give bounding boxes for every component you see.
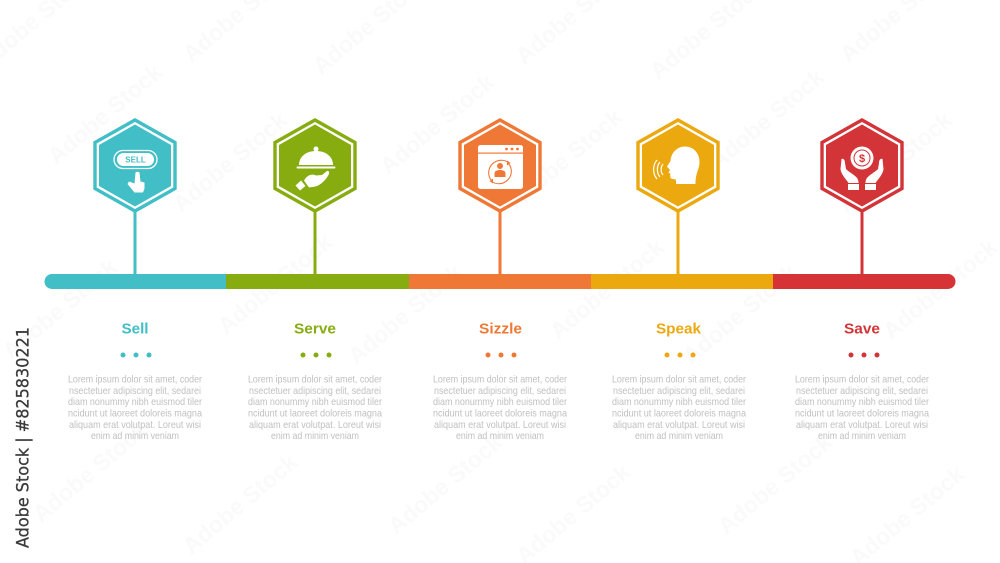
text block: Sell: enim ad minim veniam xyxy=(91,430,179,442)
watermark pattern: Adobe Stock xyxy=(213,229,337,339)
text block: Speak: ncidunt ut laoreet doloreis magna xyxy=(612,408,746,420)
watermark pattern: Adobe Stock xyxy=(705,64,829,174)
text block: Save: diam nonummy nibh euismod tiler xyxy=(795,396,929,408)
watermark pattern: Adobe Stock xyxy=(383,429,507,539)
watermark pattern: Adobe Stock xyxy=(678,259,802,369)
text block: Serve: ncidunt ut laoreet doloreis magna xyxy=(248,408,382,420)
watermark pattern: Adobe Stock xyxy=(833,107,957,217)
title: Sizzle: Sizzle xyxy=(479,322,522,338)
watermark pattern: Adobe Stock xyxy=(343,259,467,369)
watermark pattern: Adobe Stock xyxy=(713,429,837,539)
text block: Sell: Lorem ipsum dolor sit amet, coder xyxy=(68,374,202,386)
hexagon marker: Save xyxy=(822,120,902,276)
watermark pattern: Adobe Stock xyxy=(28,417,152,527)
dots: Sell xyxy=(120,352,152,358)
panel: Sizzle xyxy=(433,120,567,442)
title: Save: Save xyxy=(844,322,880,338)
icon: cloche on serving hand xyxy=(296,146,336,190)
panel: Save xyxy=(795,120,929,442)
text block: Serve: diam nonummy nibh euismod tiler xyxy=(248,396,382,408)
panel: Serve xyxy=(248,120,382,442)
text block: Serve: nsectetuer adipiscing elit, sedarei xyxy=(249,385,381,397)
text block: Sell: nsectetuer adipiscing elit, sedarei xyxy=(69,385,201,397)
watermark pattern: Adobe Stock xyxy=(375,69,499,179)
watermark pattern: Adobe Stock xyxy=(43,59,167,169)
hexagon marker: Speak xyxy=(638,120,718,276)
text block: Speak: aliquam erat volutpat. Loreut wisi xyxy=(613,419,745,431)
watermark pattern: Adobe Stock xyxy=(545,234,669,344)
text block: Speak xyxy=(612,374,746,442)
text block: Save: Lorem ipsum dolor sit amet, coder xyxy=(795,374,929,386)
icon: hands holding coin xyxy=(840,146,884,190)
watermark pattern: Adobe Stock xyxy=(178,449,302,559)
icon: sell button and pointing hand: SELL xyxy=(125,156,146,165)
panel: Speak xyxy=(612,120,746,442)
stock credit: Adobe Stock | #825830221 xyxy=(14,327,34,548)
text block: Save: enim ad minim veniam xyxy=(818,430,906,442)
text block: Sizzle: diam nonummy nibh euismod tiler xyxy=(433,396,567,408)
text block: Sizzle: enim ad minim veniam xyxy=(456,430,544,442)
text block: Sell: diam nonummy nibh euismod tiler xyxy=(68,396,202,408)
dots: Speak xyxy=(664,352,696,358)
icon: browser window with user cycle xyxy=(478,145,523,189)
text block: Save: ncidunt ut laoreet doloreis magna xyxy=(795,408,929,420)
hexagon marker: Serve xyxy=(275,120,355,276)
text block: Sell: aliquam erat volutpat. Loreut wisi xyxy=(69,419,201,431)
watermark pattern: Adobe Stock xyxy=(168,107,292,217)
text block: Sizzle: Lorem ipsum dolor sit amet, coder xyxy=(433,374,567,386)
dots: Save xyxy=(848,352,880,358)
text block: Serve xyxy=(248,374,382,442)
text block: Sizzle: ncidunt ut laoreet doloreis magna xyxy=(433,408,567,420)
watermark pattern: Adobe Stock xyxy=(878,234,1000,344)
text block: Sizzle: aliquam erat volutpat. Loreut wisi xyxy=(434,419,566,431)
text block: Save: aliquam erat volutpat. Loreut wisi xyxy=(796,419,928,431)
text block: Sell: ncidunt ut laoreet doloreis magna xyxy=(68,408,202,420)
dots: Sizzle xyxy=(486,352,516,358)
title: Speak: Speak xyxy=(656,322,702,338)
text block: Serve: enim ad minim veniam xyxy=(271,430,359,442)
text block: Speak: enim ad minim veniam xyxy=(635,430,723,442)
icon: hands holding coin: $ xyxy=(859,153,865,165)
text block: Sell xyxy=(68,374,202,442)
icon: sell button and pointing hand xyxy=(114,150,157,192)
text block: Speak: nsectetuer adipiscing elit, sedarei xyxy=(613,385,745,397)
title: Sell: Sell xyxy=(122,322,148,338)
watermark pattern: Adobe Stock xyxy=(0,254,122,364)
text block: Sizzle: nsectetuer adipiscing elit, sedarei xyxy=(434,385,566,397)
text block: Serve: aliquam erat volutpat. Loreut wisi xyxy=(249,419,381,431)
panel: Sell xyxy=(68,120,202,442)
hexagon marker: Sizzle xyxy=(460,120,540,276)
watermark pattern: Adobe Stock xyxy=(503,104,627,214)
text block: Save xyxy=(795,374,929,442)
title: Serve: Serve xyxy=(294,322,336,338)
text block: Sizzle xyxy=(433,374,567,442)
text block: Speak: Lorem ipsum dolor sit amet, coder xyxy=(612,374,746,386)
hexagon marker: Sell xyxy=(95,120,175,276)
text block: Speak: diam nonummy nibh euismod tiler xyxy=(612,396,746,408)
text block: Serve: Lorem ipsum dolor sit amet, coder xyxy=(248,374,382,386)
timeline bar xyxy=(45,274,956,289)
dots: Serve xyxy=(300,352,332,358)
text block: Save: nsectetuer adipiscing elit, sedarei xyxy=(796,385,928,397)
icon: speaking head xyxy=(654,146,700,184)
